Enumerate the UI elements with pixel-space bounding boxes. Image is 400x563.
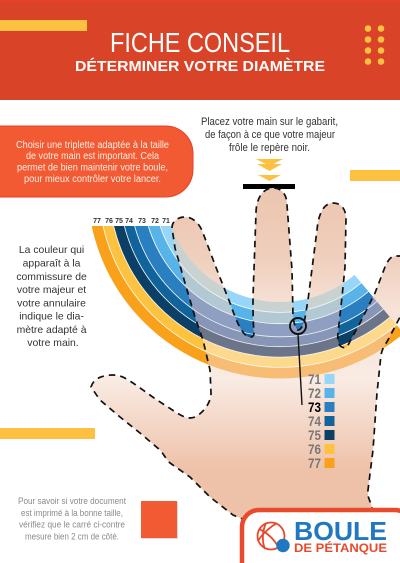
explanatory text: votre majeur et	[17, 285, 86, 296]
logo wordmark: BOULE	[294, 516, 387, 546]
explanatory text: commissure de	[16, 272, 87, 283]
logo panel: DE PÉTANQUE	[294, 540, 387, 555]
gauge labels: 76	[105, 218, 113, 225]
print size note: Pour savoir si votre document	[18, 496, 126, 506]
explanatory text: mètre adapté à	[17, 325, 87, 336]
explanatory text: indique le dia-	[19, 312, 84, 322]
legend: diameters: 74	[308, 413, 321, 429]
subtitle: DÉTERMINER VOTRE DIAMÈTRE	[75, 58, 325, 75]
callout: choosing a triplette: de votre main est important. Cela	[26, 151, 159, 162]
callout: choosing a triplette: permet de bien maintenir votre boule,	[17, 162, 168, 174]
left accent bar	[0, 428, 95, 439]
icon: yellow chevrons	[256, 159, 283, 181]
logo panel	[242, 510, 400, 563]
print size note: est imprimé à la bonne taille,	[21, 508, 123, 518]
black reference mark	[243, 184, 295, 189]
explanatory text: votre annulaire	[17, 298, 86, 310]
gauge arc: diameter bands	[92, 226, 400, 365]
legend: diameters: 76	[308, 441, 321, 457]
print size note: mesure bien 2 cm de côté.	[25, 532, 119, 542]
callout: choosing a triplette	[0, 126, 193, 197]
instruction text: Placez votre main sur le gabarit,	[201, 116, 338, 128]
gauge labels: 74	[125, 218, 133, 225]
legend: diameters: 77	[308, 455, 321, 471]
instruction text: de façon à ce que votre majeur	[205, 129, 335, 141]
explanatory text: apparaît à la	[23, 258, 81, 270]
explanatory text: votre main.	[27, 338, 79, 349]
gauge labels: 75	[115, 218, 123, 225]
legend: diameters: 71	[308, 371, 321, 387]
hand template	[90, 188, 400, 520]
header accent bar	[0, 20, 87, 31]
2 cm calibration square	[141, 501, 178, 539]
gauge labels: 72	[151, 218, 159, 225]
legend: diameters: 75	[308, 427, 321, 443]
marker circle and leader line	[290, 318, 306, 405]
header banner	[0, 0, 400, 100]
gauge labels: 77	[93, 218, 101, 225]
header dots	[365, 25, 384, 65]
title: FICHE CONSEIL	[110, 27, 290, 58]
gauge labels: 73	[138, 218, 146, 225]
icon: petanque ball	[258, 522, 290, 552]
right accent bar	[350, 170, 400, 181]
print size note: vérifiez que le carré ci-contre	[19, 520, 125, 530]
legend: diameters	[308, 371, 334, 471]
legend: diameters: 73	[308, 399, 321, 415]
instruction text: frôle le repère noir.	[229, 142, 310, 154]
legend: diameters: 72	[308, 385, 321, 401]
gauge labels	[93, 218, 170, 225]
explanatory text: La couleur qui	[19, 245, 84, 256]
gauge labels: 71	[162, 218, 170, 225]
callout: choosing a triplette: Choisir une triplette adaptée à la taille	[16, 140, 169, 151]
callout: choosing a triplette: pour mieux contrôler votre lancer.	[24, 174, 161, 185]
